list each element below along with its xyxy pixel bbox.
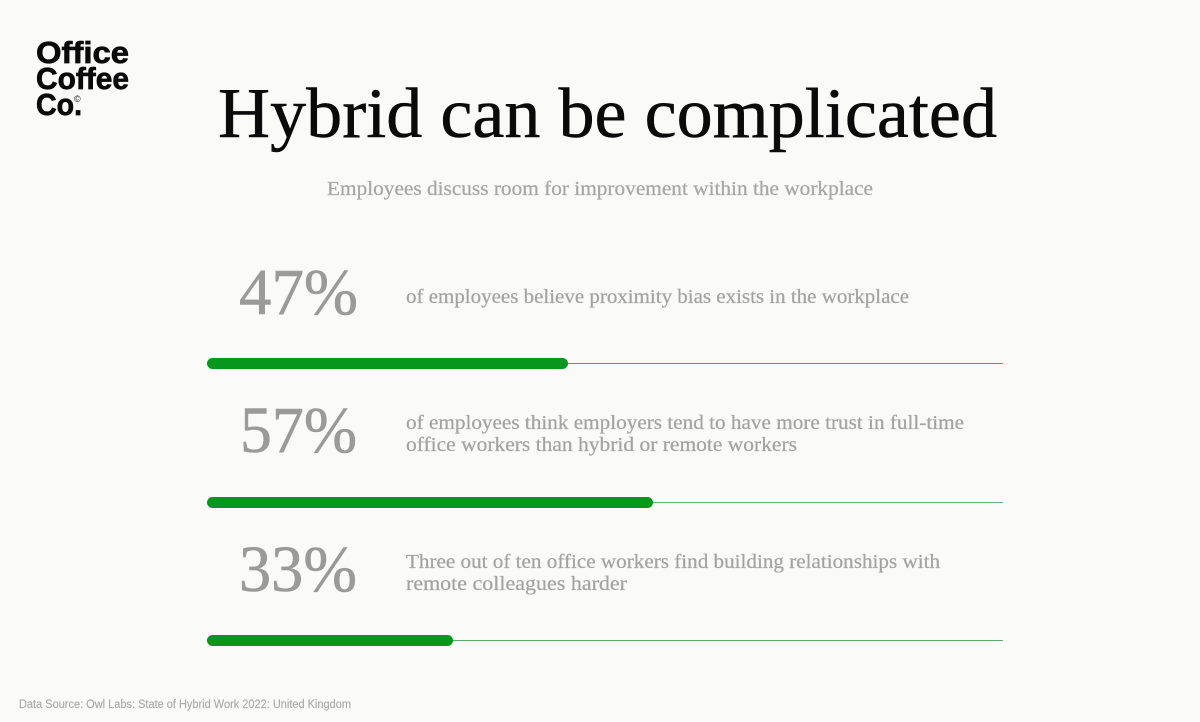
stat number: 57%: 57% [240,394,357,467]
subtitle: Employees discuss room for improvement within the workplace [327,178,873,200]
logo: Office Coffee Co. [36,35,129,122]
progress bar: 57% [207,497,1003,508]
stat number: 47%: 47% [239,256,358,329]
progress bar: 47% [207,358,1003,369]
stat description: of employees think employers tend to have more trust in full-time [406,412,964,434]
stat description: office workers than hybrid or remote workers [406,434,797,456]
stat description [406,551,940,595]
stat description: Three out of ten office workers find building relationships with [406,551,940,573]
stat row: 57% [207,394,1003,508]
progress bar: 33% [207,635,1003,646]
logo: Office Coffee Co.: Co. [36,87,82,122]
title: Hybrid can be complicated [218,75,997,153]
stat description [406,412,964,456]
data source footer: Data Source: Owl Labs: State of Hybrid Work 2022: United Kingdom [19,699,351,711]
logo: Office Coffee Co.: Coffee [36,61,129,96]
logo: Office Coffee Co.: Office [36,35,129,70]
stat row: 33% [207,533,1003,646]
stat number: 33%: 33% [239,533,357,606]
stat row: 47% [207,256,1003,369]
stat description: remote colleagues harder [406,573,627,595]
stat description: of employees believe proximity bias exists in the workplace [406,286,909,308]
logo: Office Coffee Co.: © [74,94,81,104]
